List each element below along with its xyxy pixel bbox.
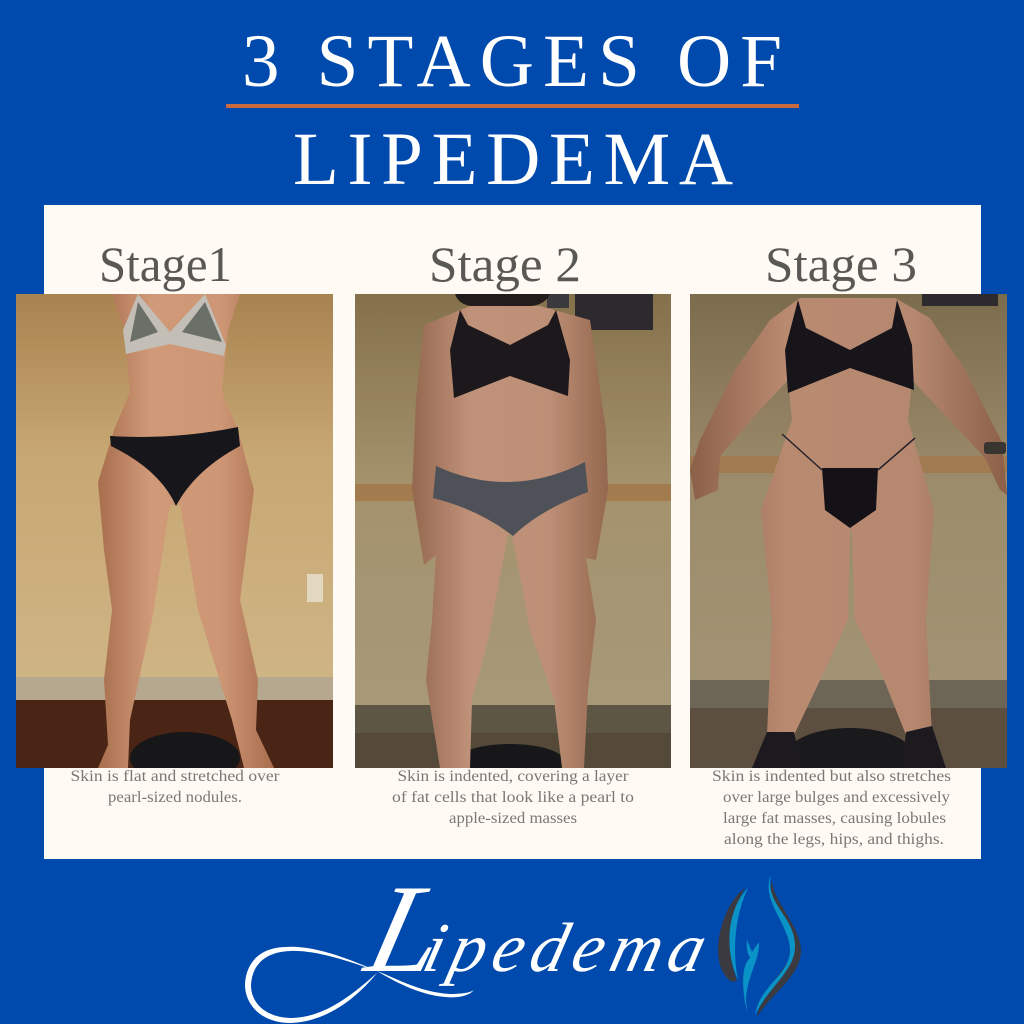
caption: stage 3 [712,768,951,848]
caption: stage 3: over large bulges and excessively [723,789,950,806]
caption: stage 2: apple-sized masses [449,810,577,827]
caption: stage 3: large fat masses, causing lobules [723,810,946,827]
caption: stage 1: Skin is flat and stretched over [70,768,280,785]
caption: stage 1 [70,768,280,806]
title: 3 STAGES OF [242,20,782,103]
logo wordmark: Lipedema [353,859,734,999]
caption: stage 1: pearl-sized nodules. [108,789,242,806]
heading: stage 3: Stage 3 [765,236,917,292]
title: LIPEDEMA [293,118,733,201]
heading: stage 2: Stage 2 [429,236,581,292]
icon: logo body mark [718,875,801,1017]
title rule [226,104,799,108]
heading: stage 1: Stage1 [99,236,232,292]
panel: stages [44,205,981,859]
caption: stage 2: Skin is indented, covering a layer [398,768,629,785]
logo swash [245,947,474,1023]
caption: stage 3: along the legs, hips, and thighs. [724,831,944,848]
caption: stage 2: of fat cells that look like a pearl to [392,789,634,806]
caption: stage 3: Skin is indented but also stretches [712,768,951,785]
caption: stage 2 [392,768,634,827]
logo wordmark [245,859,734,1023]
photo panel: stage 3 figure [690,294,1007,780]
photo panel: stage 2 figure [355,294,671,780]
title [226,20,799,201]
photo panel: stage 1 figure [16,294,333,784]
